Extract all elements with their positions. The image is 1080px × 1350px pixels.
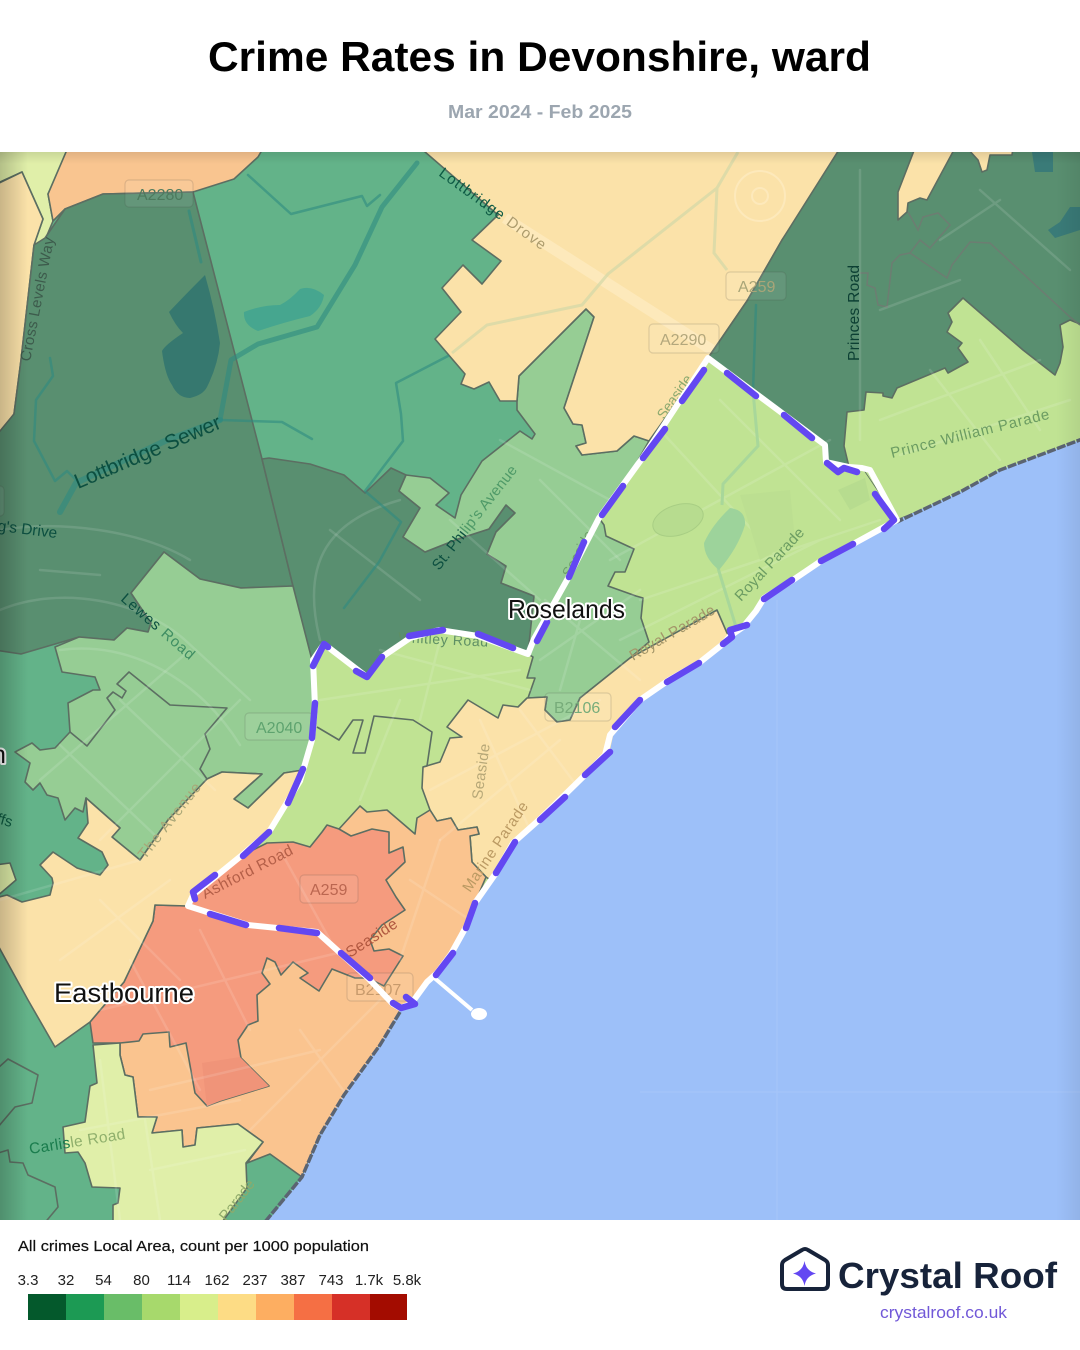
region: Prince William Parade [844,298,1080,520]
region: south pale green [63,1043,263,1225]
Lottbridge Drove wide road band [505,218,712,350]
place label: Roselands: Roselands [508,594,625,624]
region: top orange [48,145,265,221]
road number badges: B2107 [355,982,401,999]
map: crime choropleth [0,145,1080,1225]
title: Crime Rates in Devonshire, ward [208,33,871,80]
place label: Eastbourne: Eastbourne [54,978,194,1008]
pier [432,976,487,1020]
legend tick labels: 162 [204,1272,230,1289]
region: light green Lewes Road [15,552,315,860]
legend [18,1238,422,1320]
region: far-left cream [0,172,43,440]
road labels: Seaside [559,528,596,579]
circular feature [735,171,785,221]
road labels: The Avenue [135,779,205,862]
region: Hampden Park dark green centre [262,458,534,685]
legend tick labels: 743 [318,1272,344,1289]
road number badges: A259 [738,279,775,296]
legend tick labels: 237 [242,1272,268,1289]
water: station pond [244,288,324,331]
road labels: Marine Parade [459,799,532,895]
legend tick labels: 5.8k [393,1272,422,1289]
ward features [718,391,758,640]
road labels [0,164,1051,1224]
coastline [265,438,1080,1222]
road labels: Whitley Road [398,629,489,650]
east inner grey outlines [860,212,1080,325]
inner boundary lines [0,672,227,1225]
roads [0,170,1070,1220]
road number badges: A2280 [137,187,183,204]
road labels: Lottbridge Drove [436,164,549,253]
legend tick labels: 32 [58,1272,74,1289]
road number badges: A2040 [256,720,302,737]
road labels: Royal Parade [626,602,718,664]
region: light green St Philip's [399,309,649,654]
legend tick labels [18,1272,422,1289]
legend tick labels: 80 [133,1272,150,1289]
map edge shading [0,152,1080,1220]
road labels: Seaside [653,371,695,422]
light grey-green tracks north [452,152,738,353]
website: crystalroof.co.uk [880,1304,1008,1322]
road labels: Prince William Parade [889,406,1051,462]
region: east dark green [709,152,1080,464]
ward boundary: white line [188,358,897,1008]
wordmark: Crystal Roof [838,1255,1058,1296]
logo: Crystal Roof [782,1249,1058,1322]
road number badges [0,180,786,1001]
icon: star [793,1261,816,1286]
road labels: St. Philip's Avenue [429,462,521,573]
water: reservoir [162,275,220,398]
legend colour scale [28,1294,407,1320]
region: darker red patch [202,1057,269,1106]
region: Roselands light green south [527,518,649,722]
water: rivers [34,163,756,608]
water: teal docks [1032,152,1080,238]
road labels: Seaside [343,916,401,961]
road labels: Princes Road [846,265,863,361]
road labels: Carlisle Road [28,1126,126,1158]
region: seaside cream [421,609,728,880]
subtitle: date range: Mar 2024 - Feb 2025 [448,101,632,122]
region: south-west cream [0,770,303,1047]
road labels: Lewes Road [117,590,198,663]
legend tick labels: 1.7k [355,1272,384,1289]
legend tick labels: 114 [167,1272,191,1289]
region: east cream notches [898,148,1013,220]
legend tick labels: 54 [95,1272,112,1289]
road number badges: A259 [310,882,347,899]
region: north-west pale green [0,152,65,243]
road labels: Cross Levels Way [17,235,58,363]
road labels: Lottbridge Sewer [71,411,224,494]
ward boundary: purple dashes [193,370,894,1008]
region: cream north [417,145,847,455]
region: red town centre [90,825,405,1106]
region: orange town centre [120,806,510,1177]
legend tick labels: 387 [280,1272,306,1289]
road labels: Parade [216,1176,259,1224]
road number badges: A2290 [660,332,706,349]
legend title: All crimes Local Area, count per 1000 population [18,1238,369,1255]
road number badges: B2106 [554,700,600,717]
road labels: Royal Parade [731,524,808,605]
legend tick labels: 3.3 [18,1272,38,1289]
sea [265,438,1080,1225]
region: inner ward outline [317,716,432,767]
icon: house [782,1249,828,1289]
road labels: Ashford Road [199,842,296,903]
region: Devonshire ward yellow-green [258,362,890,887]
road labels: Seaside [469,743,494,801]
region: small pale left [0,863,16,898]
region: Lottbridge dark green west [0,192,293,654]
